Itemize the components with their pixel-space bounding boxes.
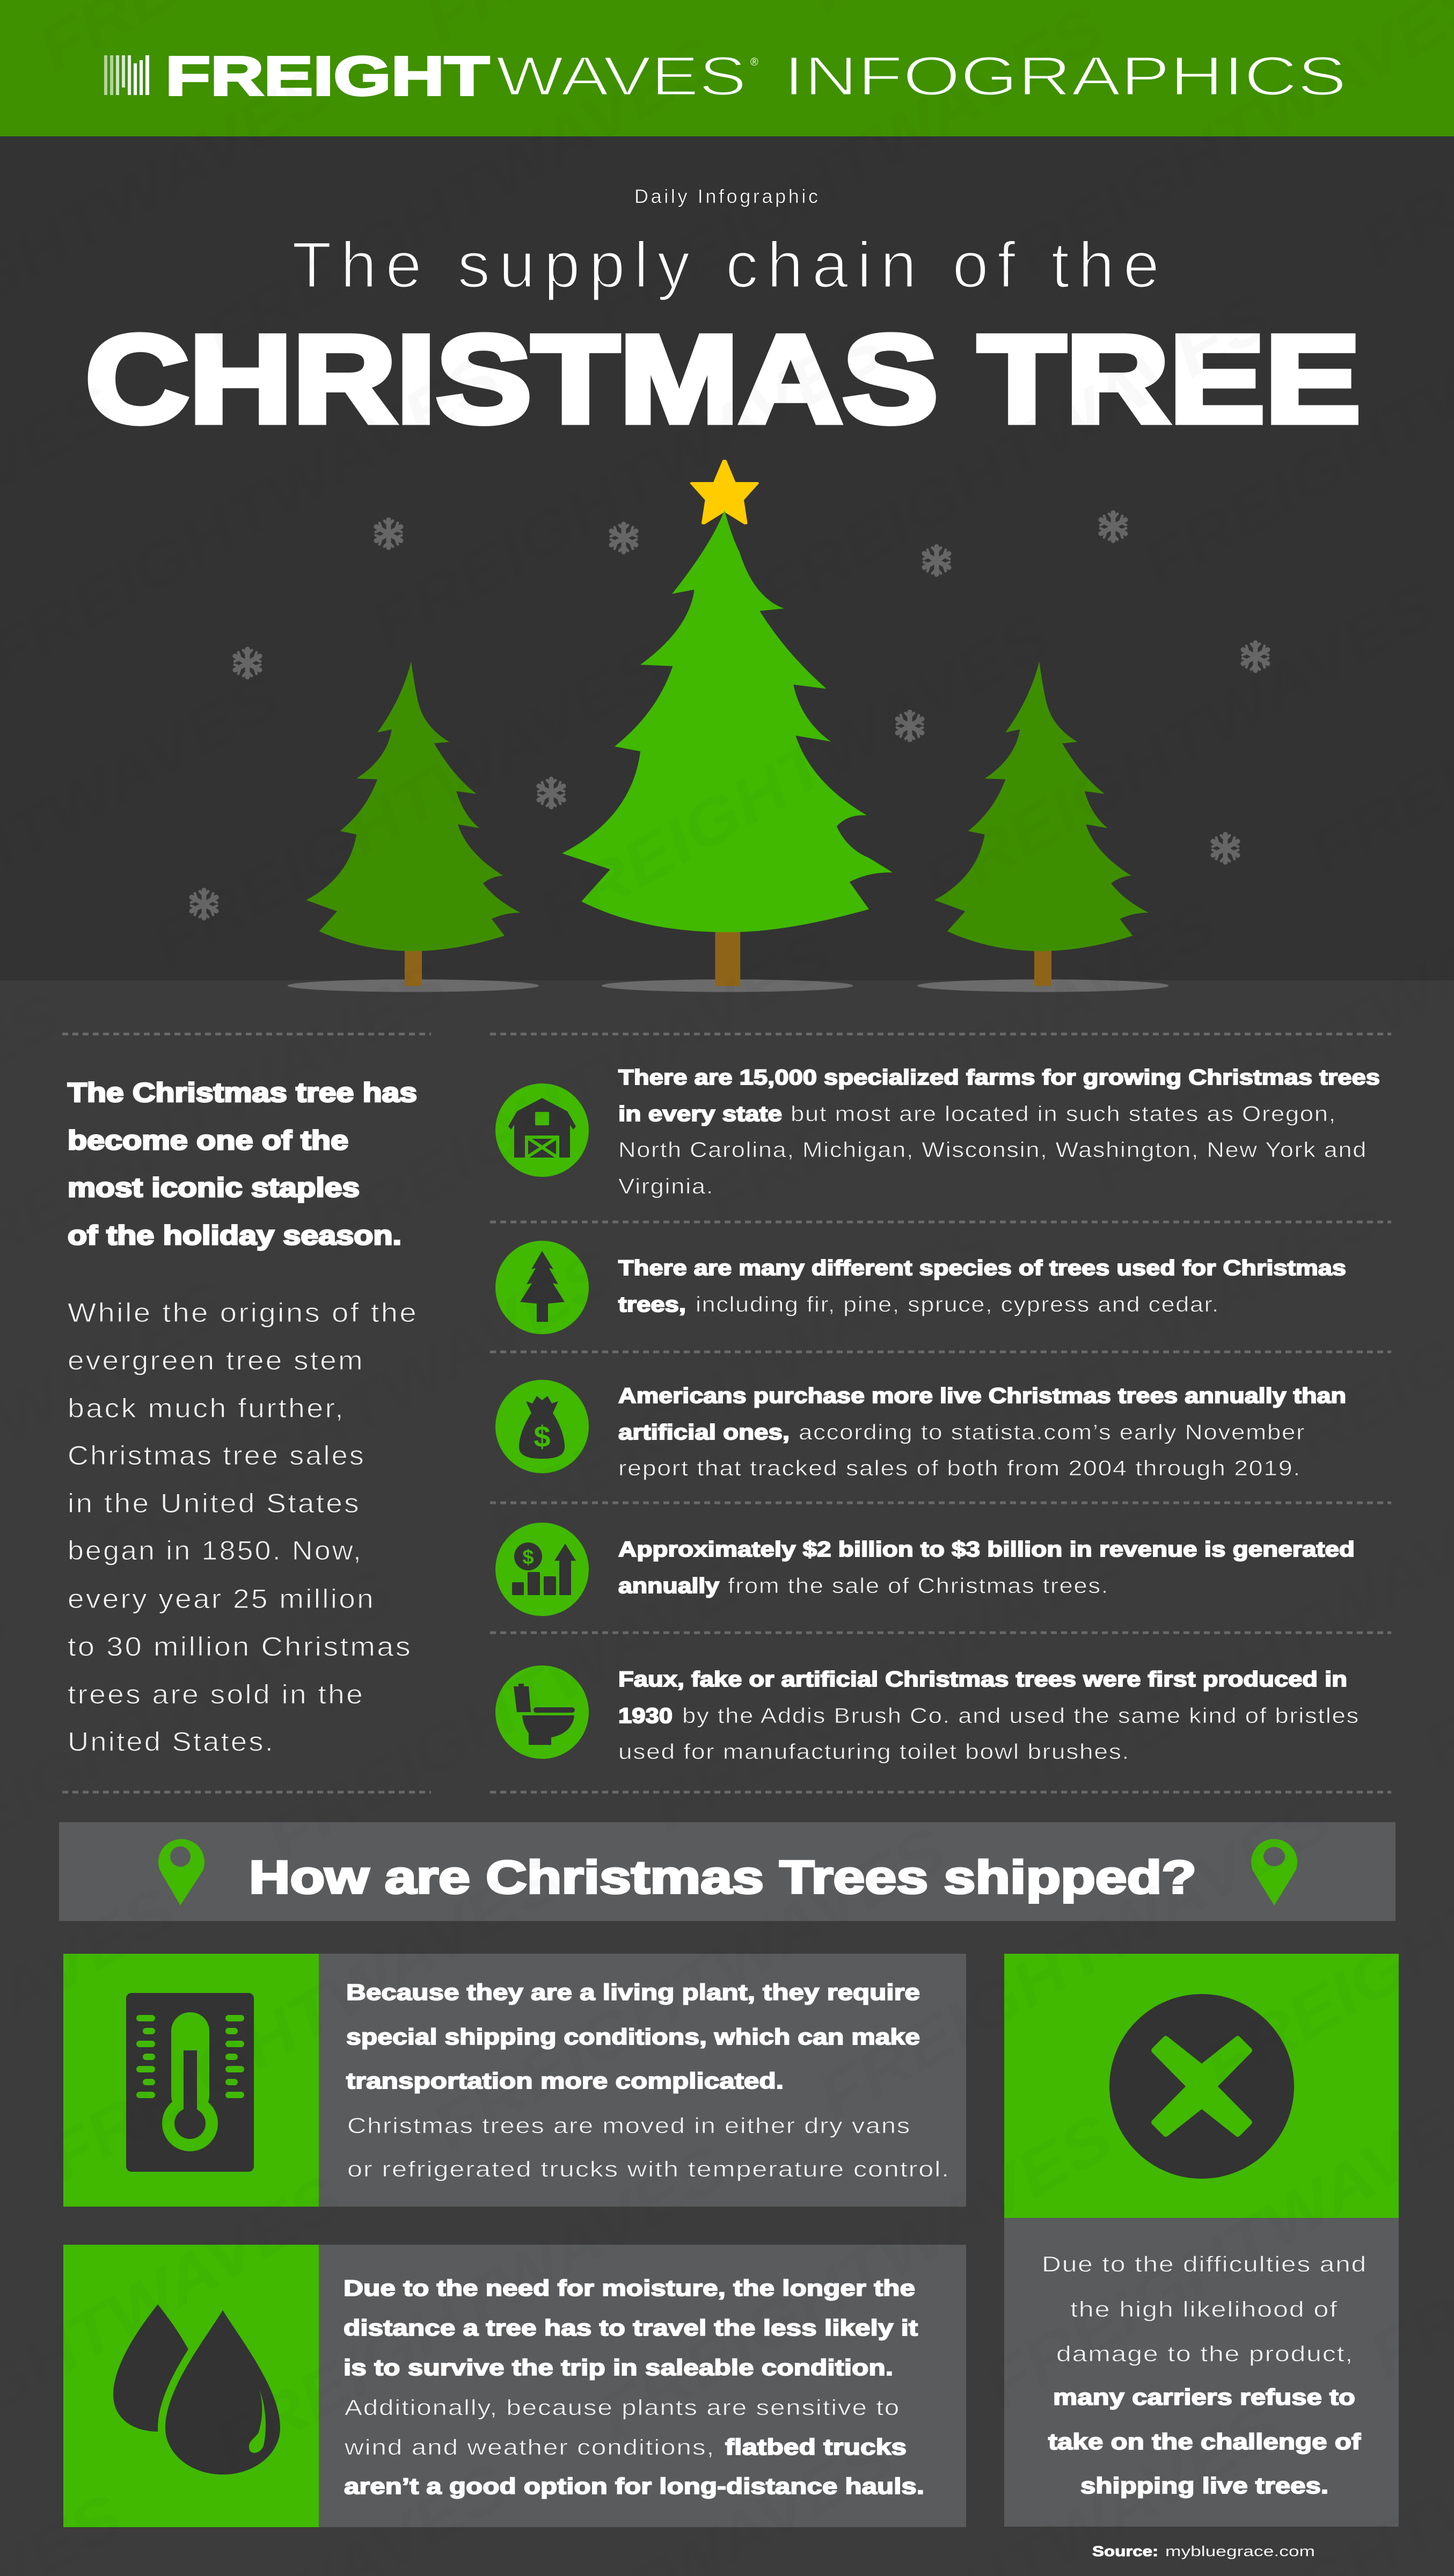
intro body: Christmas tree sales (68, 1440, 366, 1471)
source credit: mybluegrace.com (1165, 2543, 1315, 2559)
star (692, 461, 757, 523)
fact: farms: Virginia. (618, 1175, 714, 1198)
registered mark: ® (750, 56, 758, 68)
fact: farms: North Carolina, Michigan, Wisconsin, Washington, New York and (618, 1138, 1367, 1162)
icon: revenue chart: $ (522, 1546, 534, 1569)
intro body: evergreen tree stem (68, 1345, 364, 1376)
illustration: trees and snow (191, 461, 1268, 992)
intro heading (68, 1078, 417, 1250)
icon: money bag: $ (534, 1420, 551, 1453)
fact: live vs artificial: artificial ones, (618, 1421, 790, 1444)
icon: X in circle (1109, 1994, 1294, 2179)
temperature text: special shipping conditions, which can make (346, 2024, 920, 2049)
fact: farms: There are 15,000 specialized farms for growing Christmas trees (618, 1066, 1380, 1089)
fact: species: trees, (618, 1293, 686, 1316)
carriers text: the high likelihood of (1070, 2297, 1338, 2322)
logo wordmark: FREIGHT (165, 45, 489, 107)
tree: left small (306, 661, 521, 986)
fact: live vs artificial: Americans purchase more live Christmas trees annually than (618, 1384, 1346, 1408)
intro heading: The Christmas tree has (68, 1078, 417, 1108)
panel: moisture (63, 2245, 966, 2527)
intro body (68, 1298, 418, 1757)
moisture text: Additionally, because plants are sensitive to (345, 2395, 900, 2420)
section banner: how are trees shipped (59, 1822, 1395, 1921)
title line 1: The supply chain of the (292, 228, 1159, 301)
intro body: While the origins of the (68, 1298, 418, 1328)
fact: first artificial trees: by the Addis Brush Co. and used the same kind of bristles (682, 1704, 1360, 1728)
fact: live vs artificial (618, 1384, 1346, 1480)
panel: facts list (490, 1034, 1391, 1792)
moisture text: flatbed trucks (725, 2434, 907, 2459)
moisture text: is to survive the trip in saleable condition. (344, 2355, 893, 2380)
icon: money bag (495, 1380, 589, 1473)
fact: revenue: from the sale of Christmas trees. (728, 1574, 1109, 1598)
intro body: United States. (68, 1727, 275, 1757)
fact: live vs artificial: according to statista.com’s early November (799, 1421, 1305, 1444)
panel: carriers refuse (1004, 1954, 1399, 2527)
fact: revenue: Approximately $2 billion to $3 billion in revenue is generated (618, 1538, 1355, 1561)
icon: water drops (113, 2304, 280, 2475)
fact: farms (618, 1066, 1380, 1198)
icon: barn (495, 1083, 589, 1177)
moisture text (344, 2275, 924, 2499)
icon: tree (495, 1241, 589, 1334)
icon: left location pin (158, 1839, 204, 1905)
tree: center large (562, 511, 893, 986)
temperature text: Because they are a living plant, they require (346, 1980, 920, 2005)
carriers text: take on the challenge of (1048, 2429, 1361, 2454)
fact: first artificial trees: 1930 (618, 1704, 673, 1728)
panel: temperature (63, 1954, 966, 2207)
moisture text: Due to the need for moisture, the longer the (344, 2275, 915, 2301)
fact: species: There are many different species of trees used for Christmas (618, 1256, 1346, 1280)
icon: right location pin (1251, 1839, 1297, 1905)
header title: INFOGRAPHICS (784, 45, 1347, 107)
moisture text: aren’t a good option for long-distance hauls. (344, 2473, 924, 2499)
fact: species: including fir, pine, spruce, cypress and cedar. (696, 1293, 1219, 1316)
fact: first artificial trees: Faux, fake or artificial Christmas trees were first produced in (618, 1668, 1347, 1691)
header banner (0, 0, 1454, 136)
carriers text (1042, 2252, 1367, 2498)
fact: revenue (618, 1538, 1355, 1598)
carriers text: damage to the product, (1056, 2341, 1354, 2366)
fact: first artificial trees: used for manufacturing toilet bowl brushes. (618, 1740, 1130, 1764)
panel: intro text (62, 1034, 431, 1792)
temperature text (346, 1980, 950, 2181)
moisture text: wind and weather conditions, (344, 2435, 715, 2459)
icon: toilet (495, 1665, 589, 1759)
ground shadows (288, 979, 1168, 992)
intro body: in the United States (68, 1488, 361, 1518)
temperature text: Christmas trees are moved in either dry vans (347, 2113, 911, 2138)
intro body: every year 25 million (68, 1584, 375, 1614)
temperature text: transportation more complicated. (346, 2068, 784, 2093)
intro body: began in 1850. Now, (68, 1536, 363, 1566)
moisture text: distance a tree has to travel the less likely it (344, 2315, 918, 2340)
snowflakes (191, 513, 1268, 918)
fact: farms: but most are located in such states as Oregon, (791, 1102, 1336, 1126)
tree: right small (934, 661, 1149, 986)
icon: thermometer (126, 1993, 254, 2172)
title line 2: CHRISTMAS TREE (85, 310, 1361, 449)
intro heading: most iconic staples (68, 1173, 360, 1203)
intro body: trees are sold in the (68, 1679, 364, 1709)
intro heading: become one of the (68, 1125, 348, 1155)
logo wordmark: waves: WAVES (496, 45, 747, 107)
carriers text: many carriers refuse to (1053, 2384, 1355, 2410)
icon: revenue chart (495, 1523, 589, 1616)
fact: first artificial trees (618, 1668, 1360, 1764)
fact: revenue: annually (618, 1574, 720, 1598)
fact: farms: in every state (618, 1102, 782, 1126)
intro body: back much further, (68, 1393, 345, 1423)
temperature text: or refrigerated trucks with temperature control. (347, 2157, 950, 2181)
banner heading: How are Christmas Trees shipped? (249, 1852, 1196, 1903)
source credit (1092, 2543, 1315, 2559)
background: lower area (0, 980, 1454, 2576)
source credit: Source: (1092, 2543, 1158, 2559)
fact: live vs artificial: report that tracked sales of both from 2004 through 2019. (618, 1457, 1301, 1480)
eyebrow: daily infographic: Daily Infographic (634, 185, 818, 207)
logo mark: barcode bars (104, 55, 149, 95)
carriers text: Due to the difficulties and (1042, 2252, 1367, 2276)
carriers text: shipping live trees. (1080, 2473, 1328, 2498)
background: upper dark area (0, 0, 1454, 980)
intro body: to 30 million Christmas (68, 1632, 412, 1662)
fact: species (618, 1256, 1346, 1316)
intro heading: of the holiday season. (68, 1220, 401, 1250)
